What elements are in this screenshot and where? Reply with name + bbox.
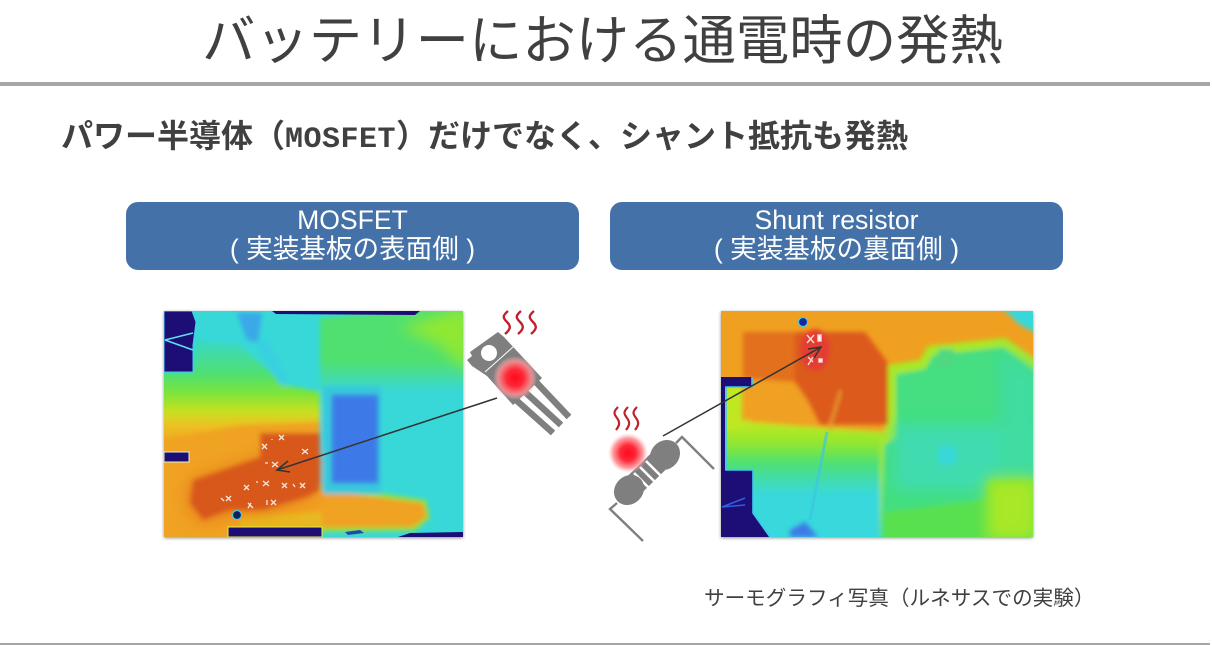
bottom rule bbox=[0, 643, 1210, 645]
title: バッテリーにおける通電時の発熱 bbox=[202, 12, 1003, 71]
arrow: MOSFET to hot spot bbox=[277, 398, 497, 472]
icon: shunt resistor component bbox=[608, 407, 714, 541]
arrow: shunt resistor to hot spot bbox=[663, 347, 821, 436]
header: MOSFET bbox=[126, 202, 579, 270]
header: Shunt resistor bbox=[610, 202, 1063, 270]
dark masks bbox=[721, 377, 770, 537]
header: Shunt resistor: Shunt resistor bbox=[754, 205, 919, 235]
title rule bbox=[0, 82, 1210, 86]
subtitle: パワー半導体（MOSFET）だけでなく、シャント抵抗も発熱 bbox=[61, 118, 908, 157]
solder marks bbox=[221, 435, 308, 508]
icon: MOSFET component bbox=[467, 311, 569, 433]
header: Shunt resistor: ( 実装基板の裏面側 ) bbox=[714, 234, 959, 264]
solder marks bbox=[807, 335, 822, 365]
thermal image: shunt resistor side bbox=[710, 306, 1040, 545]
header: MOSFET: MOSFET bbox=[297, 205, 408, 235]
caption: サーモグラフィ写真（ルネサスでの実験） bbox=[704, 587, 1094, 610]
dark masks bbox=[164, 311, 196, 372]
icon: heat waves bbox=[504, 311, 536, 334]
header: MOSFET: ( 実装基板の表面側 ) bbox=[230, 234, 475, 264]
thermal image: MOSFET side bbox=[160, 305, 470, 540]
icon: heat waves bbox=[614, 407, 638, 430]
